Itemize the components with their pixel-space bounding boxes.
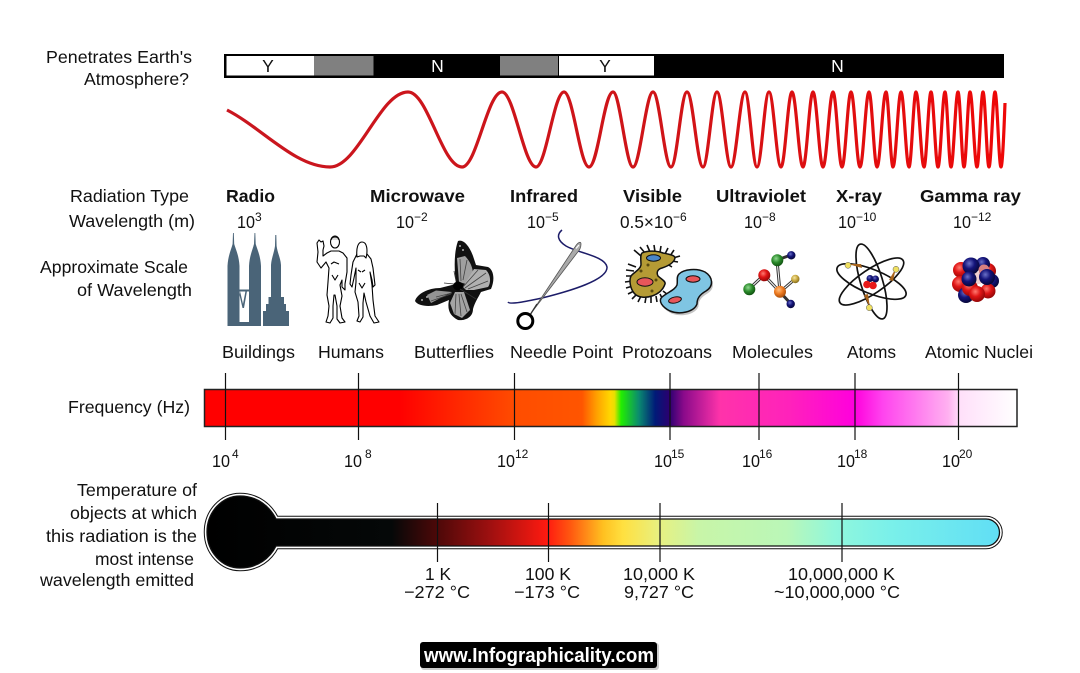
radiation type names: Infrared bbox=[510, 186, 578, 206]
temperature labels: 100 K bbox=[525, 564, 571, 584]
scale names: Protozoans bbox=[622, 342, 712, 362]
icon: molecule bbox=[743, 251, 800, 308]
scale names: Atomic Nuclei bbox=[925, 342, 1033, 362]
frequency labels: 10 bbox=[497, 451, 515, 471]
label: temperature bbox=[39, 480, 197, 590]
thermometer bbox=[207, 496, 1000, 568]
temperature labels: −272 °C bbox=[404, 582, 470, 602]
wavelength values: 10 bbox=[744, 212, 762, 232]
icon: butterfly bbox=[415, 241, 493, 320]
scale names bbox=[222, 342, 1033, 362]
wavelength values: 3 bbox=[255, 210, 262, 224]
label: temperature: objects at which bbox=[70, 503, 197, 523]
wavelength values: 10 bbox=[237, 212, 255, 232]
wavelength values: −8 bbox=[762, 210, 776, 224]
wavelength values: 10 bbox=[838, 212, 856, 232]
temperature labels: ~10,000,000 °C bbox=[774, 582, 900, 602]
temperature labels: 1 K bbox=[425, 564, 451, 584]
label: approximate scale: of Wavelength bbox=[77, 280, 192, 300]
radiation type names bbox=[226, 186, 1021, 206]
temperature labels: 10,000,000 K bbox=[788, 564, 895, 584]
temperature labels: 9,727 °C bbox=[624, 582, 694, 602]
icon: atomic nucleus bbox=[952, 257, 999, 303]
wavelength values: −5 bbox=[545, 210, 559, 224]
label: radiation type: Radiation Type bbox=[70, 186, 189, 206]
scale names: Needle Point bbox=[510, 342, 613, 362]
temperature labels bbox=[404, 564, 900, 602]
man bbox=[317, 240, 347, 323]
atmosphere bar: N bbox=[831, 56, 844, 76]
frequency labels: 16 bbox=[759, 447, 773, 461]
radiation type names: X-ray bbox=[836, 186, 882, 206]
frequency labels: 10 bbox=[212, 451, 230, 471]
frequency spectrum bar bbox=[204, 373, 1017, 440]
temperature labels: 10,000 K bbox=[623, 564, 695, 584]
atmosphere bar: Y bbox=[599, 56, 611, 76]
label: penetrates atmosphere: Atmosphere? bbox=[84, 69, 189, 89]
label: approximate scale bbox=[40, 257, 192, 300]
wave: wavelength decreasing bbox=[227, 92, 1005, 167]
frequency labels: 10 bbox=[742, 451, 760, 471]
website badge: www.Infographicality.com bbox=[423, 645, 654, 667]
frequency labels: 8 bbox=[365, 447, 372, 461]
wavelength values: 0.5×10 bbox=[620, 212, 673, 232]
label: wavelength: Wavelength (m) bbox=[69, 211, 195, 231]
frequency labels: 15 bbox=[671, 447, 685, 461]
frequency labels: 20 bbox=[959, 447, 973, 461]
wavelength values bbox=[237, 210, 992, 232]
radiation type names: Radio bbox=[226, 186, 275, 206]
frequency labels: 12 bbox=[515, 447, 529, 461]
label: temperature: most intense bbox=[95, 549, 194, 569]
scale names: Butterflies bbox=[414, 342, 494, 362]
woman bbox=[350, 254, 379, 323]
wavelength values: −12 bbox=[971, 210, 992, 224]
wavelength values: −10 bbox=[856, 210, 877, 224]
frequency labels: 10 bbox=[654, 451, 672, 471]
atmosphere bar: Y bbox=[262, 56, 274, 76]
wavelength values: 10 bbox=[396, 212, 414, 232]
frequency labels bbox=[212, 447, 973, 471]
label: penetrates atmosphere: Penetrates Earth's bbox=[46, 47, 192, 67]
icon: buildings bbox=[228, 233, 289, 326]
frequency labels: 10 bbox=[344, 451, 362, 471]
label: penetrates atmosphere bbox=[46, 47, 192, 89]
atmosphere bar: N bbox=[431, 56, 444, 76]
scale names: Atoms bbox=[847, 342, 896, 362]
label: approximate scale: Approximate Scale bbox=[40, 257, 188, 277]
label: frequency: Frequency (Hz) bbox=[68, 397, 190, 417]
radiation type names: Ultraviolet bbox=[716, 186, 806, 206]
frequency labels: 18 bbox=[854, 447, 868, 461]
wavelength values: −6 bbox=[673, 210, 687, 224]
scale names: Humans bbox=[318, 342, 384, 362]
frequency labels: 4 bbox=[232, 447, 239, 461]
frequency labels: 10 bbox=[837, 451, 855, 471]
frequency labels: 10 bbox=[942, 451, 960, 471]
label: temperature: wavelength emitted bbox=[39, 570, 194, 590]
atmosphere bar bbox=[224, 54, 1004, 78]
radiation type names: Visible bbox=[623, 186, 682, 206]
wavelength values: 10 bbox=[953, 212, 971, 232]
scale names: Buildings bbox=[222, 342, 295, 362]
radiation type names: Gamma ray bbox=[920, 186, 1021, 206]
wavelength values: −2 bbox=[414, 210, 428, 224]
icon: atom bbox=[833, 241, 910, 322]
icon: humans bbox=[317, 236, 379, 323]
scale names: Molecules bbox=[732, 342, 813, 362]
label: temperature: this radiation is the bbox=[46, 526, 197, 546]
radiation type names: Microwave bbox=[370, 186, 465, 206]
icon: needle and thread bbox=[508, 230, 607, 328]
icon: protozoans bbox=[625, 245, 713, 315]
wavelength values: 10 bbox=[527, 212, 545, 232]
temperature labels: −173 °C bbox=[514, 582, 580, 602]
label: temperature: Temperature of bbox=[77, 480, 197, 500]
